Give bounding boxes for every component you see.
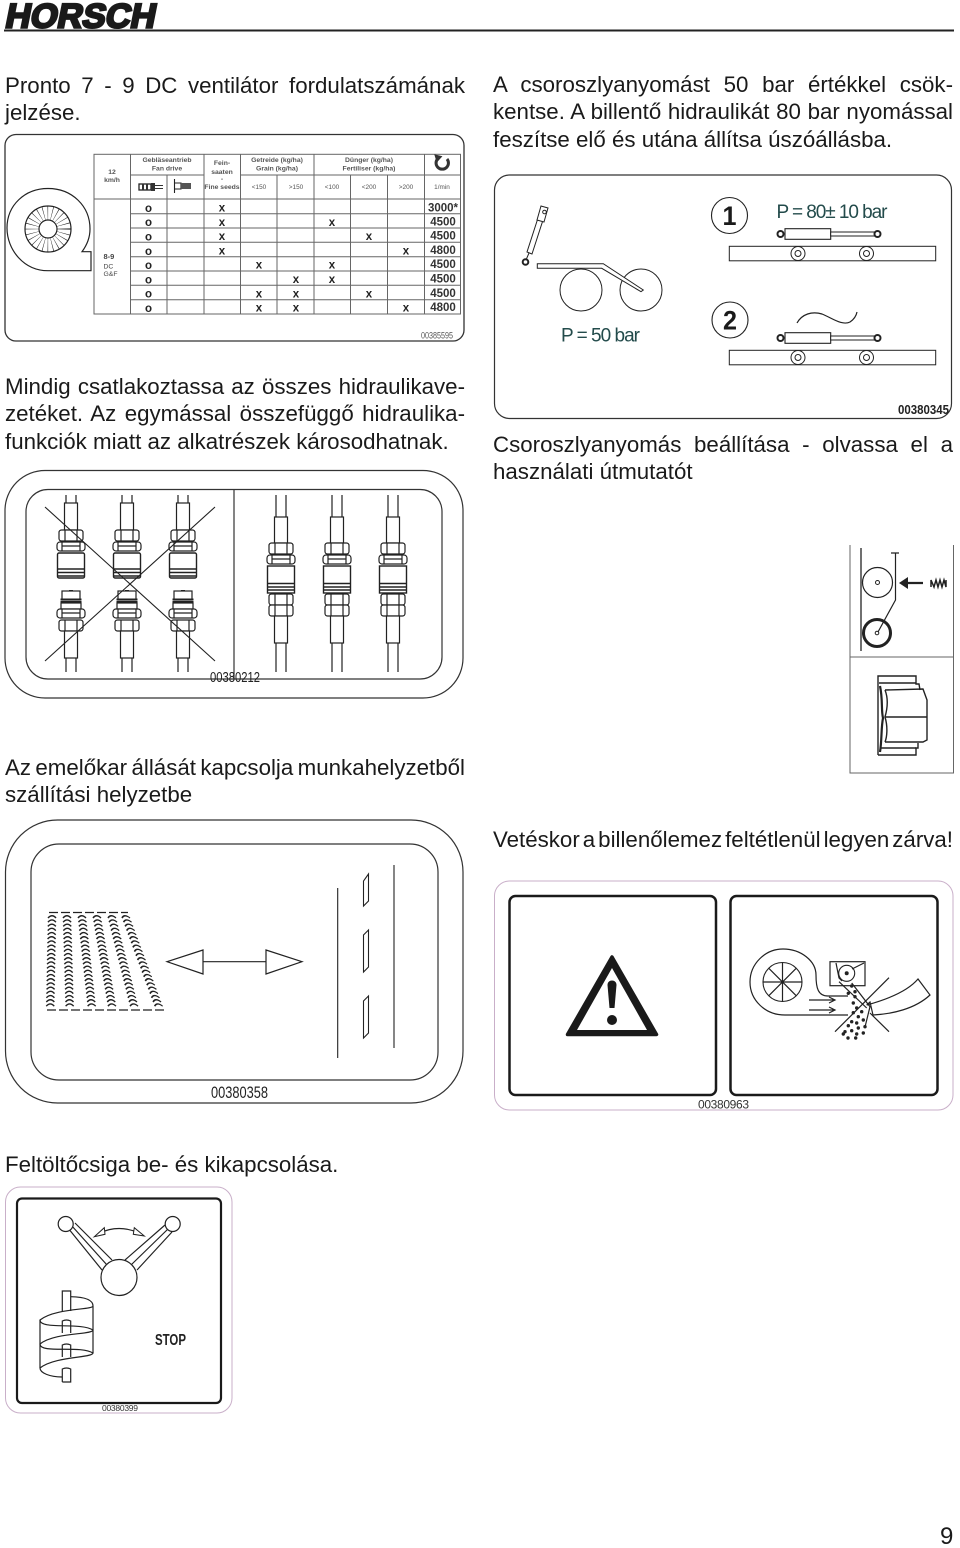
- table header: Gebläseantrieb: [142, 157, 192, 164]
- table marks: x: [329, 217, 336, 229]
- table marks: 4500: [430, 230, 456, 242]
- text: fan speed heading: [4, 72, 465, 125]
- table marks: x: [293, 288, 300, 300]
- text: hydraulic connection warning: [5, 374, 465, 454]
- icon: warning triangle: [568, 957, 656, 1034]
- text: coulter pressure setting: használati útmutatót: [493, 459, 693, 484]
- text: hydraulic connection warning: zetéket. Az egymással összefüggő hidraulika-: [5, 401, 465, 426]
- right: coupled connectors: [267, 495, 407, 672]
- table marks: 4800: [430, 302, 456, 314]
- table header: <150: [252, 184, 267, 191]
- part number: 00380399: [102, 1403, 138, 1413]
- text: hydraulic connection warning: funkciók miatt az alkatrészek károsodhatnak.: [5, 429, 449, 454]
- table header: -: [221, 176, 223, 183]
- table header: Dünger (kg/ha): [345, 157, 393, 164]
- part number: 00380212: [210, 670, 260, 686]
- panel: auger switch label: [6, 1187, 232, 1413]
- table marks: x: [256, 260, 263, 272]
- table marks: x: [293, 274, 300, 286]
- table marks: x: [329, 260, 336, 272]
- text: coulter pressure setting: [493, 432, 954, 484]
- table header: 12: [108, 169, 116, 176]
- table header: Fein-: [214, 160, 230, 167]
- text: coulter pressure setting: Csoroszlyanyomás beállítása - olvassa el a: [493, 432, 953, 456]
- text: coulter pressure instruction: [493, 72, 953, 152]
- table marks: x: [403, 246, 410, 258]
- step 1: 1: [722, 201, 736, 231]
- table header: <200: [362, 184, 377, 191]
- icon: press wheels: [537, 264, 662, 311]
- icon: rotation arrow: [435, 155, 448, 169]
- icon: auger: [40, 1291, 93, 1382]
- table marks: x: [293, 302, 300, 314]
- table marks: x: [219, 246, 226, 258]
- table marks: 4500: [430, 259, 456, 271]
- table marks: x: [366, 288, 373, 300]
- table row label: DC: [104, 264, 113, 270]
- table header: >150: [289, 184, 304, 191]
- icon: closed flap: [878, 676, 927, 755]
- table header: saaten: [211, 169, 233, 176]
- table marks: x: [256, 302, 263, 314]
- text: lift lever heading: szállítási helyzetbe: [5, 782, 192, 807]
- table marks: x: [256, 288, 263, 300]
- table marks: o: [145, 274, 152, 286]
- table header: 1/min: [434, 184, 450, 191]
- panel: coulter pressure label: [494, 175, 952, 418]
- table header: >200: [399, 184, 414, 191]
- table marks: o: [145, 288, 152, 300]
- table marks: o: [145, 260, 152, 272]
- table marks: [145, 202, 459, 315]
- table marks: 4500: [430, 274, 456, 286]
- icon: switch lever: [58, 1216, 180, 1296]
- table marks: x: [219, 231, 226, 243]
- table header: Fine seeds: [204, 184, 240, 191]
- table header: km/h: [104, 177, 120, 184]
- table marks: x: [219, 202, 226, 214]
- table grid: [94, 154, 460, 314]
- icon: hydraulic cylinder: [523, 206, 548, 265]
- icon: fan drive hydraulic: [139, 183, 163, 191]
- text: coulter pressure instruction: feszítse elő és utána állítsa úszóállásba.: [493, 127, 892, 152]
- table marks: o: [145, 203, 152, 215]
- table marks: o: [145, 246, 152, 258]
- table header: [104, 155, 450, 193]
- panel: fan speed table label: [5, 134, 464, 342]
- text: coulter pressure instruction: kentse. A billentő hidraulikát 80 bar nyomással: [493, 99, 953, 124]
- icon: rollers and spring: [861, 548, 946, 651]
- icon: fan housing: [7, 188, 91, 271]
- text: fan speed heading: jelzése.: [5, 100, 81, 125]
- table marks: x: [366, 231, 373, 243]
- icon: field rows: [46, 912, 165, 1010]
- icon: fan drive mechanical: [174, 179, 191, 193]
- table header: <100: [325, 184, 340, 191]
- text: fan speed heading: Pronto 7 - 9 DC ventilátor fordulatszámának: [5, 72, 465, 98]
- pressure label 50 bar: P = 50 bar: [561, 326, 641, 346]
- wrong: uncoupled connectors crossed out: [45, 495, 215, 672]
- text: lift lever heading: [5, 754, 465, 807]
- step 2: 2: [723, 306, 737, 336]
- table marks: 4800: [430, 245, 456, 257]
- part number: 00380358: [211, 1083, 268, 1102]
- table marks: o: [145, 217, 152, 229]
- table header: Grain (kg/ha): [256, 166, 298, 172]
- table marks: x: [219, 217, 226, 229]
- text: auger heading: Feltöltőcsiga be- és kikapcsolása.: [5, 1152, 338, 1176]
- panel: lift lever position label: [6, 820, 463, 1103]
- panel: seed flap diagram: [850, 545, 954, 773]
- step 2: [712, 302, 936, 365]
- text: coulter pressure instruction: A csoroszlyanyomást 50 bar értékkel csök-: [493, 72, 953, 96]
- table marks: 4500: [430, 288, 456, 300]
- panel: hydraulic couplings label: [5, 470, 463, 698]
- table marks: x: [403, 302, 410, 314]
- icon: blower and seed metering: [750, 949, 930, 1040]
- part number: 00380345: [898, 402, 949, 417]
- part number: 00380963: [698, 1098, 749, 1112]
- table marks: 4500: [430, 216, 456, 228]
- table header: Fan drive: [152, 166, 182, 172]
- table marks: x: [329, 274, 336, 286]
- part number: 00385595: [421, 330, 453, 342]
- text: lift lever heading: Az emelőkar állását kapcsolja munkahelyzetből: [5, 754, 465, 780]
- table marks: o: [145, 232, 152, 244]
- table header: Fertiliser (kg/ha): [343, 166, 395, 172]
- table row label: G&F: [104, 271, 117, 278]
- icon: road: [338, 865, 394, 1058]
- step 1: [712, 198, 936, 261]
- text: hydraulic connection warning: Mindig csatlakoztassa az összes hidraulikave-: [5, 374, 465, 398]
- table header: Getreide (kg/ha): [251, 157, 303, 164]
- panel: warning label: [494, 881, 953, 1112]
- text: flap instruction: Vetéskor a billenőlemez feltétlenül legyen zárva!: [493, 826, 953, 852]
- table marks: o: [145, 303, 152, 315]
- table marks: 3000*: [428, 202, 459, 214]
- table row label: 8-9: [104, 252, 114, 261]
- table row label: [104, 252, 117, 278]
- arrow: double headed: [167, 950, 302, 974]
- stop label: STOP: [155, 1332, 186, 1349]
- step 1: P = 80± 10 bar: [776, 202, 888, 223]
